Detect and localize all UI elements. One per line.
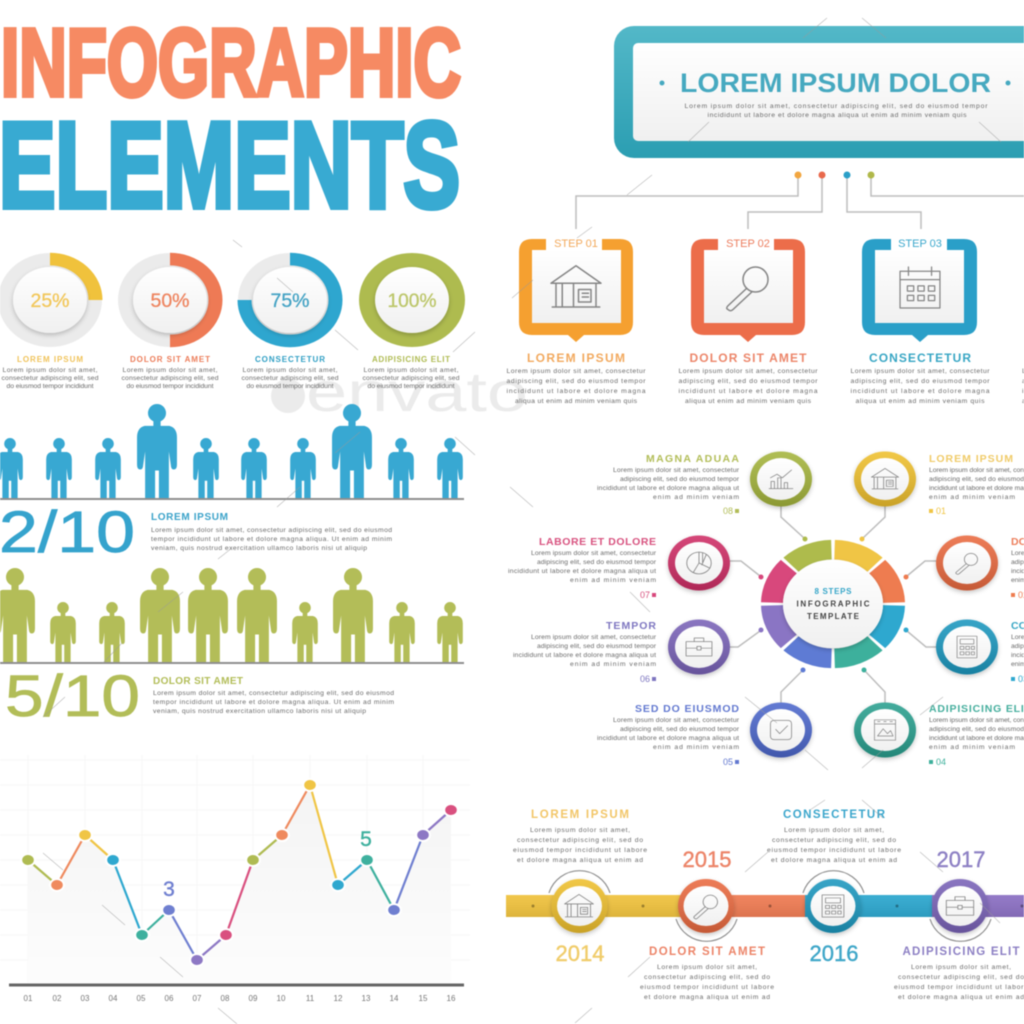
panel: percentage donuts	[0, 253, 465, 390]
donut 50%: consectetur adipiscing elit, sed	[122, 375, 219, 382]
label 06: TEMPOR	[606, 620, 656, 632]
watermark: envato: envato	[306, 360, 528, 423]
years	[556, 847, 985, 966]
label 07: LABORE ET DOLORE	[539, 536, 656, 548]
chart points	[21, 779, 458, 966]
label 06: adipiscing elit, sed do eiusmod tempor	[537, 643, 657, 650]
chart axis	[9, 984, 464, 986]
donut 50%: do eiusmod tempor incididunt	[126, 383, 214, 390]
chart axis labels: 15	[419, 994, 428, 1003]
donut 25%: LOREM IPSUM	[17, 355, 83, 364]
icon: house	[551, 266, 601, 307]
clipped text of fourth step: i	[1022, 388, 1024, 395]
description: lorem ipsum: LOREM IPSUM	[151, 512, 228, 523]
step label: STEP 02	[726, 238, 770, 250]
text block consectetur	[767, 809, 901, 864]
watermark: envato	[271, 360, 528, 423]
chart axis labels: 12	[334, 994, 343, 1003]
chart axis labels: 05	[137, 994, 146, 1003]
step label: STEP 01	[554, 238, 598, 250]
body: aliqua ut enim ad minim veniam quis	[515, 398, 638, 405]
description: lorem ipsum: veniam, quis nostrud exercitation ullamco laboris nisi ut aliquip	[151, 545, 367, 552]
text block lorem ipsum: et dolore magna aliqua ut enim ad	[517, 857, 643, 864]
pictogram: green people	[0, 568, 464, 664]
text block adipisicing elit: Lorem ipsum dolor sit amet,	[911, 964, 1011, 971]
node 02: key	[936, 536, 998, 590]
label 04	[929, 703, 1024, 767]
donut 25%: consectetur adipiscing elit, sed	[2, 375, 99, 382]
text block dolor sit amet	[640, 946, 774, 1001]
panel: step 03	[850, 236, 990, 405]
donut 25%: do eiusmod tempor incididunt	[6, 383, 94, 390]
donut 75%: do eiusmod tempor incididunt	[246, 383, 334, 390]
chart area	[28, 785, 451, 985]
label 07: 07	[640, 590, 650, 600]
label 05: 05	[723, 757, 733, 767]
label 01: LOREM IPSUM	[929, 453, 1013, 465]
label 01: Lorem ipsum dolor sit amet, con	[929, 467, 1024, 474]
title line: Infographic: INFOGRAPHIC	[1, 10, 461, 116]
body	[678, 368, 818, 405]
label 01: adipiscing elit, sed do eiusmod	[929, 476, 1024, 483]
chart axis labels: 02	[53, 994, 62, 1003]
banner inner	[633, 43, 1024, 141]
card frame	[691, 239, 805, 342]
connectors: banner to steps	[576, 172, 1024, 229]
text block consectetur: consectetur adipiscing elit, sed do	[772, 837, 896, 844]
label 05: SED DO EIUSMOD	[635, 703, 739, 715]
connectors	[730, 506, 936, 703]
wheel caption: TEMPLATE	[807, 612, 860, 621]
donut 75%	[238, 253, 342, 390]
text block lorem ipsum: Lorem ipsum dolor sit amet,	[530, 827, 630, 834]
chart axis labels: 13	[362, 994, 371, 1003]
label 01: 01	[936, 506, 946, 516]
donut 50%: Lorem ipsum dolor sit amet,	[122, 367, 218, 374]
label 08: MAGNA ADUAA	[646, 453, 739, 465]
body: Lorem ipsum dolor sit amet, consectetur	[850, 368, 990, 375]
body: incididunt ut labore et dolore magna	[850, 388, 990, 395]
donut 100%: consectetur adipiscing elit, sed	[362, 375, 460, 382]
body: aliqua ut enim ad minim veniam quis	[685, 398, 812, 405]
donut 25%	[0, 253, 102, 390]
wheel hub	[783, 560, 883, 648]
donut 75%: CONSECTETUR	[255, 355, 325, 364]
wheel ring	[772, 550, 894, 658]
banner subtext	[684, 103, 988, 119]
text block adipisicing elit: consectetur adipiscing elit, sed do	[898, 974, 1024, 981]
label 04: enim ad minim veniam	[929, 744, 1015, 751]
node 04: photo	[854, 702, 916, 758]
chart axis labels: 06	[165, 994, 174, 1003]
donut 50%	[118, 253, 222, 390]
donut 100%	[359, 253, 465, 390]
stat: 5/10: 5/10	[5, 664, 140, 729]
timeline band	[506, 895, 1024, 917]
donut 75%: Lorem ipsum dolor sit amet,	[242, 367, 338, 374]
label 07: adipiscing elit, sed do eiusmod tempor	[537, 559, 657, 566]
text block consectetur: CONSECTETUR	[783, 809, 886, 821]
banner bullets	[660, 80, 1010, 86]
text block consectetur: eiusmod tempor incididunt ut labore	[767, 847, 901, 854]
chart axis labels: 04	[109, 994, 118, 1003]
panel: green people row 5/10	[0, 568, 464, 729]
label 07: Lorem ipsum dolor sit amet, consectetur	[531, 550, 657, 557]
node 08: chart	[750, 452, 812, 506]
chart axis labels: 16	[447, 994, 456, 1003]
description: dolor sit amet: DOLOR SIT AMET	[153, 676, 243, 687]
panel: step 02	[678, 236, 818, 405]
text block consectetur: et dolore magna aliqua ut enim ad	[771, 857, 897, 864]
label 05: incididunt ut labore et dolore magna aliqua ut	[597, 735, 739, 742]
chart axis labels: 10	[277, 994, 286, 1003]
chart axis labels: 14	[390, 994, 399, 1003]
label 01	[929, 453, 1024, 516]
donut 50%: 50%	[150, 291, 190, 312]
panel: blue people row 2/10	[0, 404, 464, 565]
donut 100%: Lorem ipsum dolor sit amet,	[364, 367, 459, 374]
label 04: Lorem ipsum dolor sit amet, con	[929, 717, 1024, 724]
label 06: Lorem ipsum dolor sit amet, consectetur	[531, 634, 657, 641]
description: dolor sit amet: veniam, quis nostrud exercitation ullamco laboris nisi ut aliquip	[153, 708, 366, 715]
years: 2015	[683, 847, 731, 872]
body: aliqua ut enim ad minim veniam quis	[856, 398, 985, 405]
donut 75%: 75%	[270, 291, 310, 312]
title line: Elements: ELEMENTS	[0, 97, 460, 233]
panel: step 01	[506, 236, 646, 405]
title: Infographic Elements	[0, 10, 461, 233]
text block adipisicing elit: ADIPISICING ELIT	[902, 946, 1020, 958]
label 01: enim ad minim veniam	[929, 494, 1015, 501]
chart axis labels: 11	[306, 994, 315, 1003]
card frame	[862, 239, 977, 342]
body: incididunt ut labore et dolore magna	[506, 388, 646, 395]
step label: STEP 03	[898, 238, 942, 250]
chart axis labels: 01	[24, 994, 33, 1003]
body: Lorem ipsum dolor sit amet, consectetur	[678, 368, 818, 375]
body	[850, 368, 990, 405]
label 08: incididunt ut labore et dolore magna aliqua ut	[597, 485, 739, 492]
panel: 8 steps wheel	[508, 452, 1024, 767]
body: incididunt ut labore et dolore magna	[678, 388, 818, 395]
label 06: enim ad minim veniam	[570, 661, 656, 668]
label 07: incididunt ut labore et dolore magna aliqua ut	[508, 568, 656, 575]
icon: magnifier	[727, 267, 768, 311]
label 07: enim ad minim veniam	[570, 577, 656, 584]
chart axis labels	[24, 994, 456, 1003]
label 08: enim ad minim veniam	[653, 494, 739, 501]
text block lorem ipsum: eiusmod tempor incididunt ut labore	[513, 847, 647, 854]
banner subtext: incididunt ut labore et dolore magna aliqua ut enim ad minim veniam quis	[708, 112, 967, 119]
label 05: enim ad minim veniam	[653, 744, 739, 751]
donut 50%: DOLOR SIT AMET	[130, 355, 210, 364]
description: dolor sit amet: tempor incididunt ut labore et dolore magna aliqua. Ut enim ad minim	[153, 699, 394, 706]
chart value labels	[163, 828, 372, 901]
label 08	[597, 453, 740, 516]
donut 75%: consectetur adipiscing elit, sed	[242, 375, 339, 382]
banner heading: LOREM IPSUM DOLOR	[680, 68, 991, 98]
text block dolor sit amet: eiusmod tempor incididunt ut labore	[640, 984, 774, 991]
text block adipisicing elit: et dolore magna aliqua ut enim ad	[898, 994, 1024, 1001]
wheel caption: INFOGRAPHIC	[796, 600, 870, 608]
text block dolor sit amet: et dolore magna aliqua ut enim ad	[644, 994, 770, 1001]
label 03 (clipped)	[1011, 620, 1024, 684]
heading: LOREM IPSUM	[527, 351, 625, 365]
description: dolor sit amet: Lorem ipsum dolor sit amet, consectetur adipiscing elit, sed do eiusmod	[153, 690, 394, 697]
text block lorem ipsum: LOREM IPSUM	[531, 809, 629, 821]
panel: timeline	[506, 809, 1024, 1001]
label 06: 06	[640, 674, 650, 684]
heading: CONSECTETUR	[869, 351, 971, 365]
body: adipiscing elit, sed do eiusmod tempor	[506, 378, 646, 385]
text block lorem ipsum: consectetur adipiscing elit, sed do	[517, 837, 643, 844]
node 07: pie	[668, 536, 730, 590]
chart axis labels: 08	[221, 994, 230, 1003]
body	[506, 368, 646, 405]
label 06: incididunt ut labore et dolore magna aliqua ut	[513, 652, 656, 659]
stat: 2/10: 2/10	[0, 500, 135, 565]
description: lorem ipsum: Lorem ipsum dolor sit amet, consectetur adipiscing elit, sed do eiusmod	[151, 527, 392, 534]
node 03: calculator	[936, 620, 998, 674]
body: adipiscing elit, sed do eiusmod tempor	[678, 378, 818, 385]
heading: DOLOR SIT AMET	[690, 351, 807, 365]
label 08: adipiscing elit, sed do eiusmod tempor	[620, 476, 740, 483]
chart axis labels: 03	[81, 994, 90, 1003]
chart axis labels: 07	[193, 994, 202, 1003]
label 04: incididunt ut labore et dolore ma	[929, 735, 1024, 742]
banner frame	[614, 26, 1024, 158]
chart line segments	[28, 785, 451, 960]
wheel caption: 8 STEPS	[814, 587, 852, 596]
label 02 (clipped)	[1011, 536, 1024, 600]
wheel caption	[796, 587, 870, 621]
years: 2014	[556, 941, 604, 966]
years: 2016	[810, 941, 858, 966]
chart value labels: 3	[163, 878, 175, 901]
chart axis labels: 09	[249, 994, 258, 1003]
label 06	[513, 620, 657, 684]
pictogram: blue people	[0, 404, 464, 500]
label 04: 04	[936, 757, 946, 767]
text block lorem ipsum	[513, 809, 647, 864]
body: adipiscing elit, sed do eiusmod tempor	[850, 378, 990, 385]
label 04: adipiscing elit, sed do eiusmod	[929, 726, 1024, 733]
label 07	[508, 536, 657, 600]
node 2016	[805, 879, 861, 933]
text block dolor sit amet: DOLOR SIT AMET	[649, 946, 765, 958]
description: dolor sit amet	[153, 676, 394, 715]
node 2014	[552, 879, 608, 933]
label 08: Lorem ipsum dolor sit amet, consectetur	[613, 467, 740, 474]
text block consectetur: Lorem ipsum dolor sit amet,	[784, 827, 884, 834]
node 01: house	[854, 452, 916, 506]
text block adipisicing elit	[894, 946, 1024, 1001]
card frame	[519, 239, 633, 342]
halo arcs	[549, 871, 991, 941]
panel: banner	[614, 26, 1024, 158]
label 08: 08	[723, 506, 733, 516]
donut 25%: 25%	[30, 291, 70, 312]
description: lorem ipsum	[151, 512, 392, 552]
clipped text of fourth step	[1022, 368, 1024, 405]
label 05: adipiscing elit, sed do eiusmod tempor	[620, 726, 740, 733]
years: 2017	[937, 847, 985, 872]
text block dolor sit amet: consectetur adipiscing elit, sed do	[644, 974, 770, 981]
donut 100%: ADIPISICING ELIT	[372, 355, 450, 364]
panel: line chart	[0, 755, 470, 1003]
chart value labels: 5	[360, 828, 372, 851]
node 2017	[932, 879, 988, 933]
body: Lorem ipsum dolor sit amet, consectetur	[506, 368, 646, 375]
label 05: Lorem ipsum dolor sit amet, consectetur	[613, 717, 740, 724]
text block dolor sit amet: Lorem ipsum dolor sit amet,	[657, 964, 757, 971]
donut 25%: Lorem ipsum dolor sit amet,	[2, 367, 98, 374]
banner subtext: Lorem ipsum dolor sit amet, consectetur adipiscing elit, sed do eiusmod tempor	[684, 103, 988, 110]
donut 100%: do eiusmod tempor incididunt	[368, 383, 455, 390]
node 05: check	[750, 702, 812, 758]
description: lorem ipsum: tempor incididunt ut labore et dolore magna aliqua. Ut enim ad minim	[151, 536, 392, 543]
icon: calendar	[900, 267, 940, 308]
node 2015	[678, 879, 734, 933]
label 01: incididunt ut labore et dolore ma	[929, 485, 1024, 492]
donut 100%: 100%	[388, 291, 437, 312]
label 05	[597, 703, 740, 767]
node 06: briefcase	[668, 620, 730, 674]
